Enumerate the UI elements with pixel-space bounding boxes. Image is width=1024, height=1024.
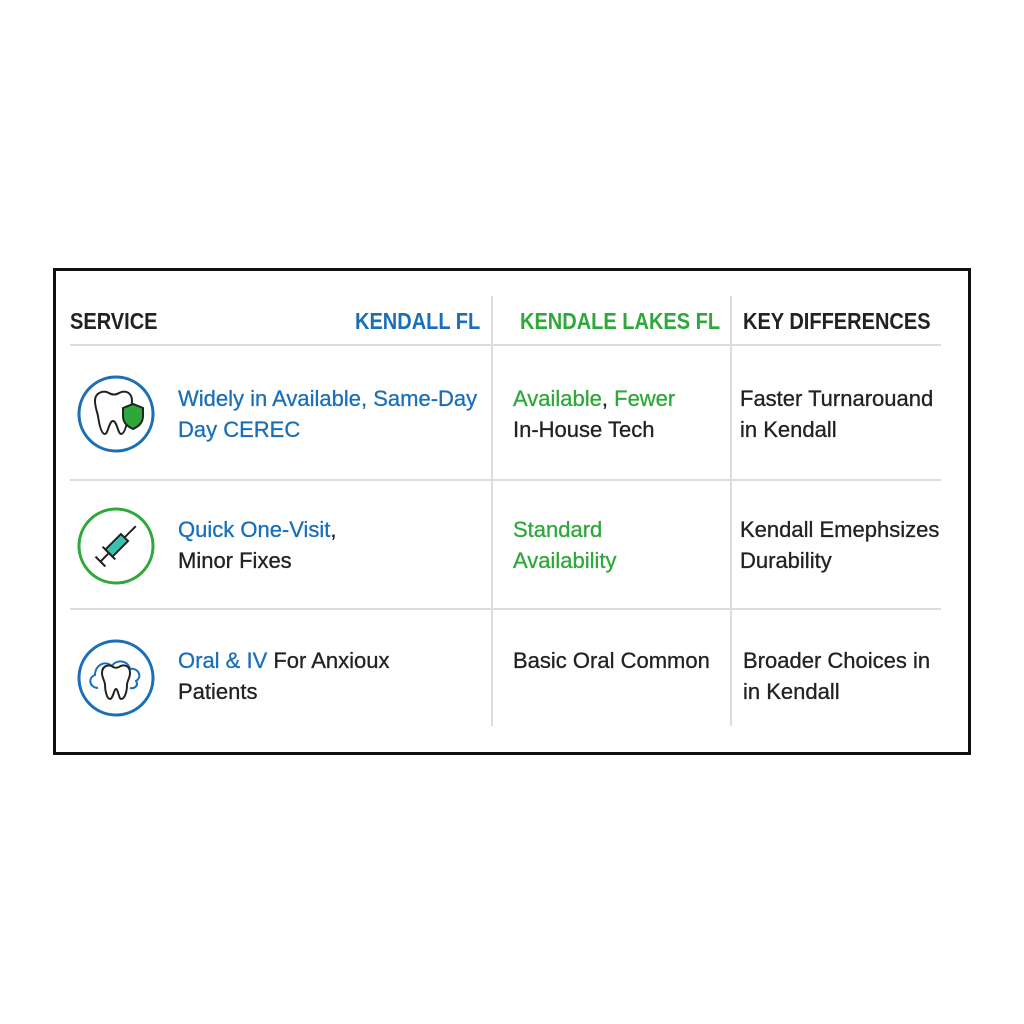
row2 diff: Kendall Emephsizes bbox=[740, 517, 939, 542]
row2 kendale bbox=[512, 517, 617, 573]
row3 diff: Broader Choices in bbox=[743, 648, 930, 673]
row2 kendale: Availability bbox=[513, 548, 617, 573]
row3 kendall bbox=[178, 648, 390, 704]
header: key differences: KEY DIFFERENCES bbox=[743, 308, 931, 334]
row2 kendale: Standard bbox=[513, 517, 602, 542]
row2 diff: Durability bbox=[740, 548, 832, 573]
row3 diff bbox=[743, 648, 930, 704]
row1 kendall bbox=[178, 386, 478, 442]
row3 diff: in Kendall bbox=[743, 679, 840, 704]
icon: tooth cloud bbox=[78, 640, 154, 716]
row2 kendall bbox=[178, 517, 337, 573]
row1 diff: Faster Turnarouand bbox=[740, 386, 933, 411]
row1 kendall: Widely in Available, Same-Day bbox=[178, 386, 477, 411]
row3 kendall: Patients bbox=[178, 679, 258, 704]
header: kendall: KENDALL FL bbox=[355, 308, 480, 334]
table frame bbox=[53, 268, 971, 755]
row3 kendale: Basic Oral Common bbox=[513, 648, 710, 673]
row3 kendall: Oral & IV For Anxioux bbox=[178, 648, 390, 673]
row1 kendale: In-House Tech bbox=[513, 417, 654, 442]
row2 kendall: Quick One-Visit, bbox=[178, 517, 337, 542]
icon: syringe bbox=[78, 508, 154, 584]
row2 kendall: Minor Fixes bbox=[178, 548, 292, 573]
row1 diff: in Kendall bbox=[740, 417, 837, 442]
icon: tooth shield bbox=[78, 376, 154, 452]
row1 diff bbox=[740, 386, 933, 442]
row1 kendale bbox=[512, 386, 675, 442]
header: service: SERVICE bbox=[70, 308, 157, 334]
row1 kendall: Day CEREC bbox=[178, 417, 300, 442]
header: kendale lakes: KENDALE LAKES FL bbox=[520, 308, 720, 334]
row1 kendale: Available, Fewer bbox=[513, 386, 675, 411]
row2 diff bbox=[740, 517, 939, 573]
